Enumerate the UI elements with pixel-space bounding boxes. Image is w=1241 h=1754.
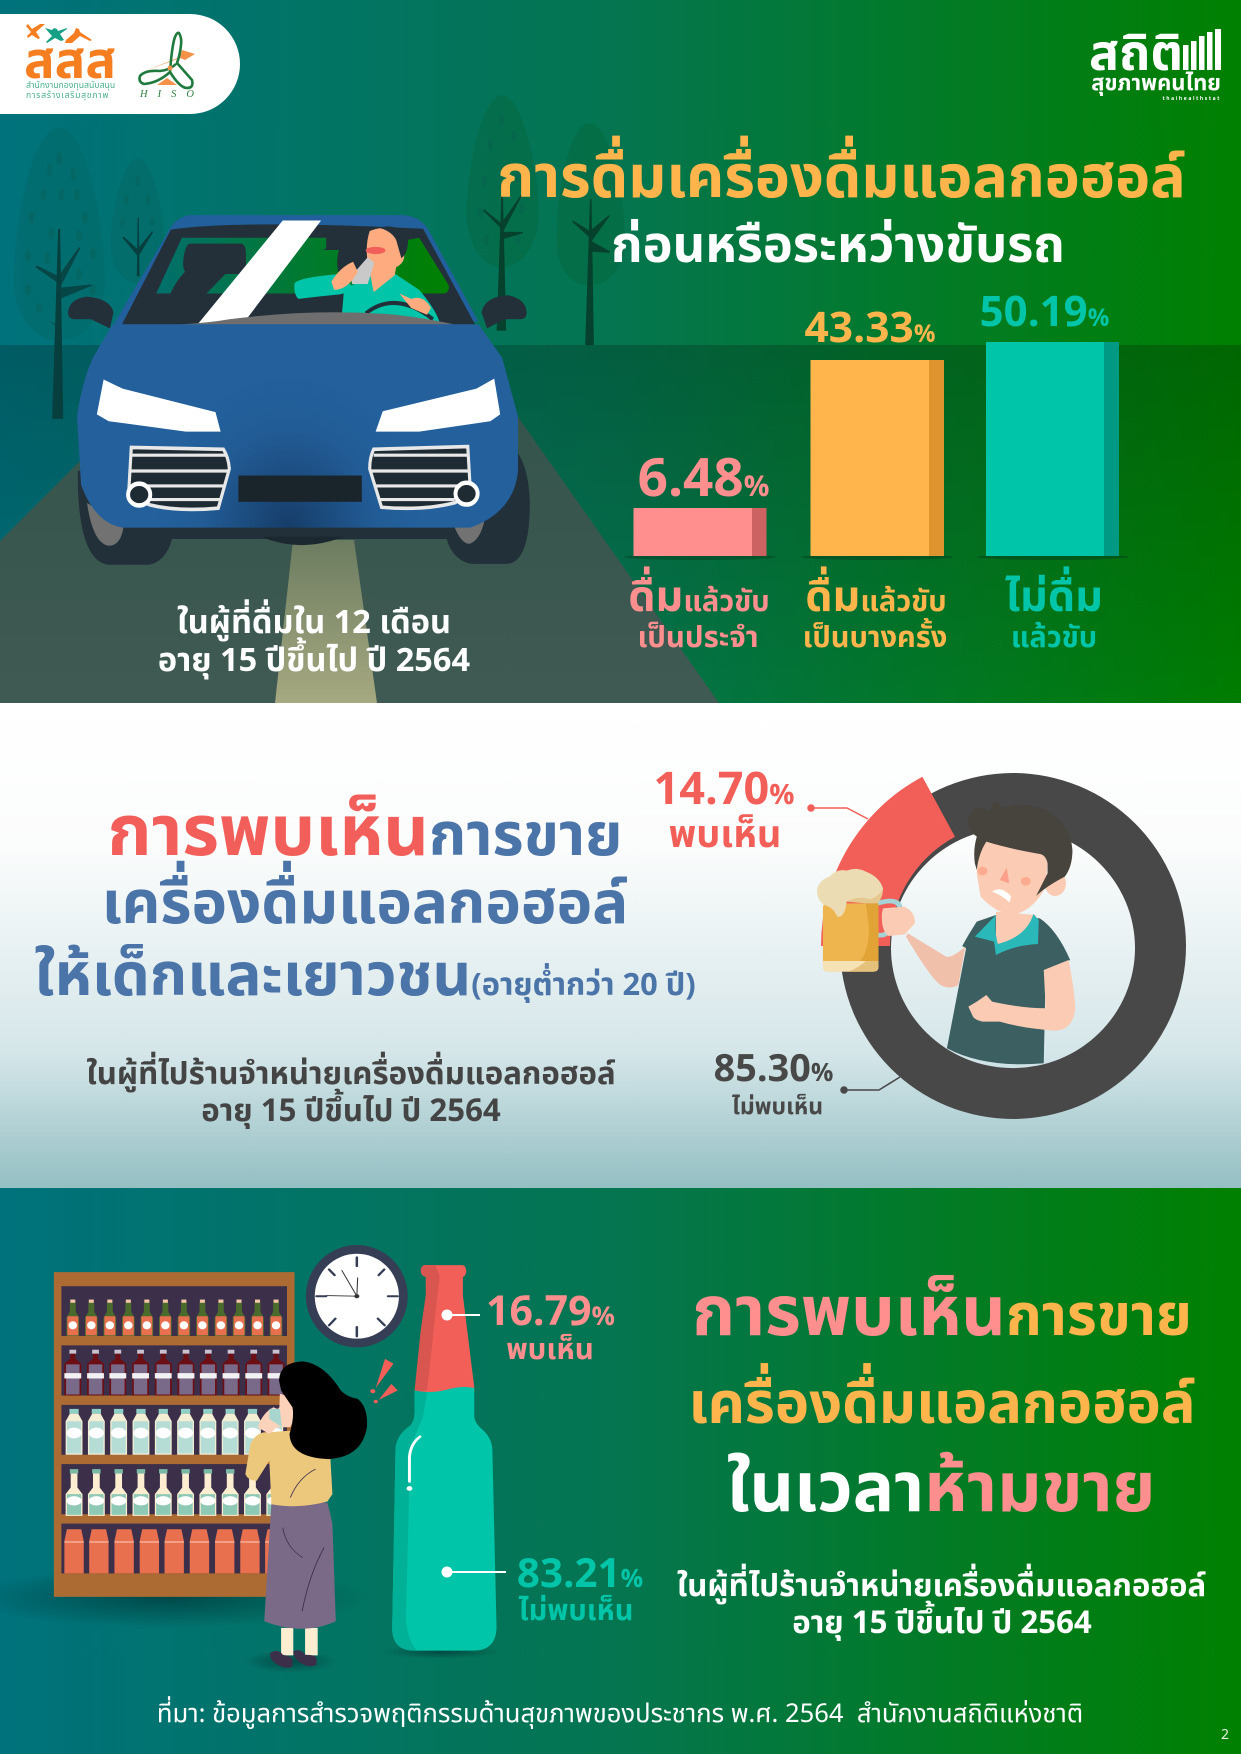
red segment 14.70 xyxy=(821,777,955,946)
value: 14.70: พบเห็น xyxy=(669,808,781,865)
heading: prohibited hours: เครื่องดื่มแอลกอฮอล์ xyxy=(688,1363,1196,1450)
value: 85.30: 85.30% xyxy=(714,1042,833,1099)
shelf row 3 xyxy=(66,1409,283,1455)
road xyxy=(0,300,719,703)
logo: thaihealthstat: สุขภาพคนไทย xyxy=(1091,67,1221,100)
label: sometimes: เป็นบางครั้ง xyxy=(803,617,947,661)
caption: prohibited hours: ในผู้ที่ไปร้านจำหน่ายเครื่องดื่มแอลกอฮอล์ xyxy=(677,1563,1206,1611)
source: ที่มา: ข้อมูลการสำรวจพฤติกรรมด้านสุขภาพของประชากร พ.ศ. 2564 สำนักงานสถิติแห่งชาติ xyxy=(157,1695,1083,1734)
illustration: shop and woman xyxy=(0,1272,370,1673)
caption: prohibited hours: อายุ 15 ปีขึ้นไป ปี 2564 xyxy=(792,1600,1092,1648)
illustration: bottle chart xyxy=(383,1265,501,1659)
bar: regularly xyxy=(634,508,766,556)
leader: 83.21 xyxy=(442,1566,506,1578)
logo: sss: การสร้างเสริมสุขภาพ xyxy=(26,89,109,102)
value: 83.21 xyxy=(517,1545,643,1634)
logo: sss: สสส xyxy=(24,24,116,101)
label: no: ไม่ดื่ม xyxy=(1005,566,1103,631)
value: 43.33: 43.33% xyxy=(805,298,935,362)
title: drink driving: ก่อนหรือระหว่างขับรถ xyxy=(611,208,1065,285)
logo: thaihealthstat xyxy=(1089,17,1221,103)
label: regularly: ดื่มแล้วขับ xyxy=(628,566,770,631)
label: no: แล้วขับ xyxy=(1011,617,1097,661)
road centre line xyxy=(275,540,377,703)
donut chart xyxy=(821,773,1186,1119)
title: drink driving: การดื่มเครื่องดื่มแอลกอฮอล์ xyxy=(497,134,1186,224)
caption: drink driving: ในผู้ที่ดื่มใน 12 เดือน xyxy=(177,599,451,648)
leader: 85.30 xyxy=(841,1077,900,1093)
label: regularly xyxy=(628,566,770,661)
shelf row 2 xyxy=(64,1350,284,1396)
value: 16.79: 16.79% xyxy=(486,1282,615,1344)
heading: prohibited hours: ในเวลาห้ามขาย xyxy=(727,1439,1155,1543)
value: 16.79 xyxy=(486,1282,615,1373)
bar: no xyxy=(986,342,1119,556)
illustration: trees xyxy=(14,95,625,419)
caption: underage sales: ในผู้ที่ไปร้านจำหน่ายเครื่องดื่มแอลกอฮอล์ xyxy=(86,1051,616,1099)
page number: 2 xyxy=(1221,1725,1229,1746)
logo pill xyxy=(0,14,240,114)
value: 85.30: ไม่พบเห็น xyxy=(732,1091,823,1125)
caption: drink driving: อายุ 15 ปีขึ้นไป ปี 2564 xyxy=(158,637,470,686)
caption: underage sales: อายุ 15 ปีขึ้นไป ปี 2564 xyxy=(201,1088,501,1136)
value: 14.70: 14.70% xyxy=(653,757,795,825)
value: 83.21: 83.21% xyxy=(517,1545,643,1606)
label: no xyxy=(1005,566,1103,661)
panel: sales during prohibited hours xyxy=(0,1188,1241,1754)
logo: HISO xyxy=(139,33,204,100)
heading: prohibited hours xyxy=(688,1263,1196,1543)
illustration: man with beer xyxy=(817,801,1075,1064)
label: regularly: เป็นประจำ xyxy=(637,617,759,661)
caption: underage sales xyxy=(86,1051,616,1136)
value: 83.21: ไม่พบเห็น xyxy=(519,1590,633,1634)
value: 6.48: 6.48% xyxy=(638,440,769,520)
value: 16.79: พบเห็น xyxy=(506,1329,594,1373)
caption: drink driving xyxy=(158,599,470,686)
heading: underage sales xyxy=(34,780,696,1022)
bar chart xyxy=(624,281,1129,661)
shelf row 1 xyxy=(66,1300,282,1336)
panel: drink driving xyxy=(0,0,1241,703)
logo: thaihealthstat: สถิติ xyxy=(1089,17,1183,93)
bar: sometimes xyxy=(810,360,944,556)
heading: underage sales: เครื่องดื่มแอลกอฮอล์ xyxy=(102,859,628,950)
woman xyxy=(245,1361,367,1668)
heading: underage sales: การพบเห็นการขาย xyxy=(108,780,622,887)
logo: HISO: HISO xyxy=(139,89,204,100)
heading: prohibited hours: การพบเห็นการขาย xyxy=(692,1263,1192,1367)
label: sometimes xyxy=(803,566,947,661)
label: sometimes: ดื่มแล้วขับ xyxy=(805,566,947,631)
logo: thaihealthstat: thaihealthstat xyxy=(1162,96,1221,103)
illustration: clock xyxy=(306,1245,408,1347)
shelf row 5 xyxy=(64,1529,284,1573)
value: 14.70 xyxy=(653,757,795,865)
caption: prohibited hours xyxy=(677,1563,1206,1648)
value: 50.19: 50.19% xyxy=(980,281,1109,345)
leader: 16.79 xyxy=(442,1310,480,1320)
illustration: car with drinking driver xyxy=(68,215,530,565)
panel: underage sales xyxy=(0,703,1241,1188)
heading: underage sales: ให้เด็กและเยาวชน(อายุต่ำกว่า 20 ปี) xyxy=(34,931,696,1022)
value: 85.30 xyxy=(714,1042,833,1125)
shelf row 4 xyxy=(66,1469,283,1516)
leader: 14.70 xyxy=(808,805,868,819)
title: drink driving xyxy=(497,134,1186,285)
icon: exclamation marks xyxy=(370,1359,398,1403)
logo: sss: สำนักงานกองทุนสนับสนุน xyxy=(26,79,115,92)
